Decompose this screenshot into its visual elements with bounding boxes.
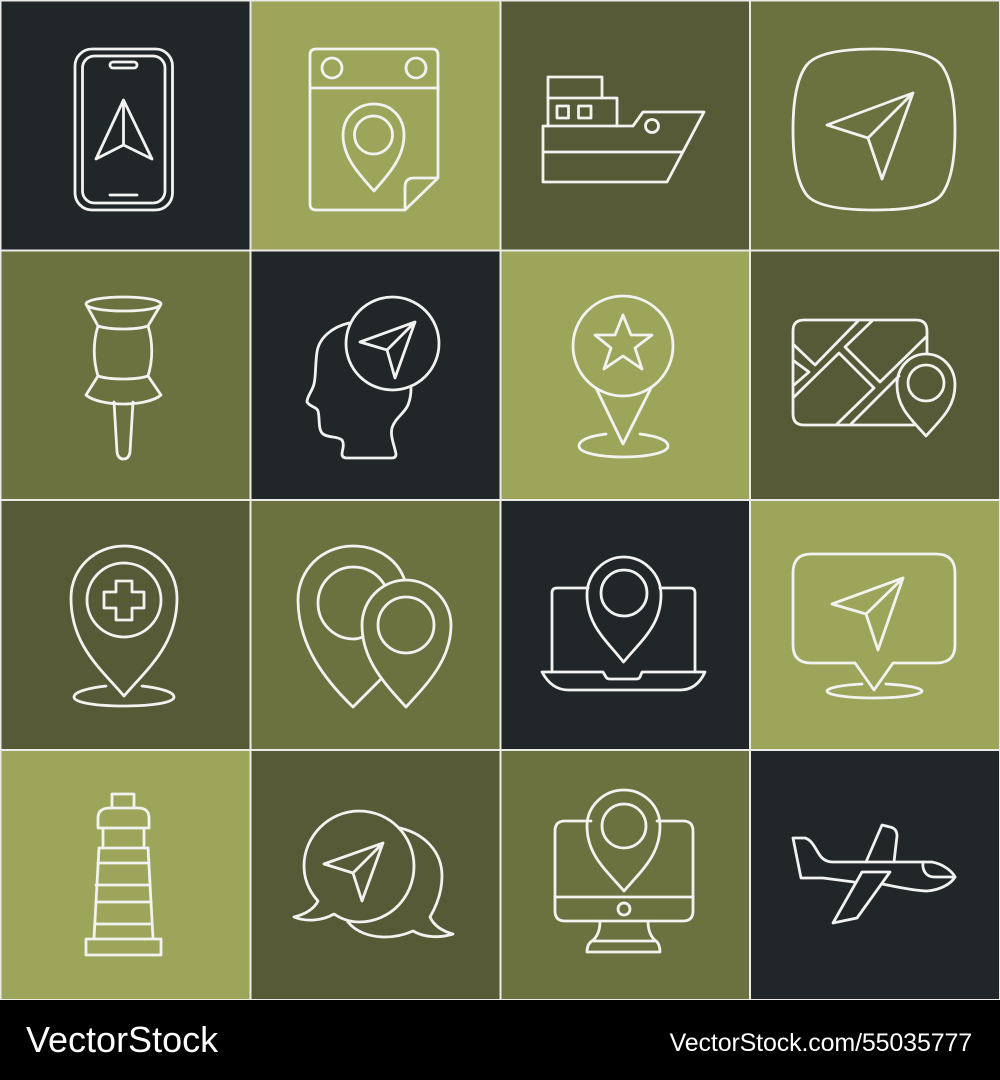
icon: smartphone with navigation arrow: [75, 49, 172, 210]
panel: row 3 column 3: [502, 501, 749, 749]
panel: row 3 column 4: [751, 501, 999, 749]
icon: desktop monitor with location pin: [555, 790, 693, 952]
footer brand: VectorStock: VectorStock: [26, 1019, 219, 1060]
icon: location pin with star: [573, 296, 673, 457]
footer bar: [0, 1000, 1000, 1080]
panel: row 1 column 4: [751, 2, 999, 250]
icon: two location pins: [298, 546, 451, 707]
icon: cargo ship: [543, 77, 704, 182]
icon: push pin: [86, 297, 161, 459]
panel: row 3 column 1: [2, 501, 250, 749]
panel: row 4 column 4: [751, 751, 999, 999]
panel: row 1 column 1: [2, 2, 250, 250]
panel: row 1 column 3: [502, 2, 749, 250]
panel: row 4 column 2: [252, 751, 500, 999]
icon: chat bubbles with navigation arrow: [294, 811, 453, 937]
panel: row 2 column 4: [751, 252, 999, 499]
icon: lighthouse: [86, 794, 161, 955]
icon: location pin with medical cross: [71, 546, 177, 706]
panel: row 3 column 2: [252, 501, 500, 749]
icon: airplane: [793, 825, 955, 923]
panel: row 2 column 2: [252, 252, 500, 499]
icon: speech bubble with navigation arrow on pin: [793, 554, 955, 698]
panel: row 4 column 1: [2, 751, 250, 999]
icon: navigation arrow in rounded square: [793, 49, 955, 210]
icon: calendar page with location pin: [310, 49, 438, 210]
icon: head with navigation arrow: [307, 297, 439, 458]
panel: row 1 column 2: [252, 2, 500, 250]
icon: map with location pin: [793, 320, 955, 436]
icon: laptop with location pin: [542, 557, 705, 690]
panel: row 4 column 3: [502, 751, 749, 999]
panel: row 2 column 3: [502, 252, 749, 499]
footer stock URL: VectorStock.com/55035777: [670, 1029, 972, 1057]
panel: row 2 column 1: [2, 252, 250, 499]
